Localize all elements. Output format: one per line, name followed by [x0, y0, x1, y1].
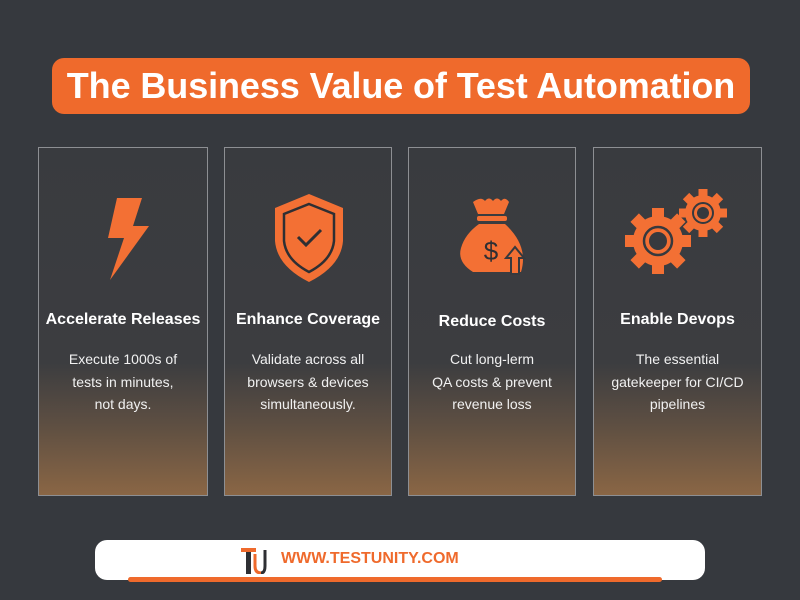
- text: accelerate: Execute 1000s of: [69, 351, 177, 367]
- panel: accelerate releases: [38, 147, 208, 496]
- text: costs: revenue loss: [452, 396, 532, 412]
- text: coverage: browsers & devices: [247, 374, 369, 390]
- text: costs: Cut long-lerm: [450, 351, 534, 367]
- text: costs: [432, 351, 552, 412]
- panel: enhance coverage: [224, 147, 392, 496]
- text: accelerate: not days.: [95, 396, 151, 412]
- icon: shield: [275, 194, 343, 282]
- text: coverage: simultaneously.: [260, 396, 356, 412]
- footer accent line: [128, 577, 662, 582]
- text: devops: gatekeeper for CI/CD: [611, 374, 744, 390]
- heading: enhance coverage: Enhance Coverage: [236, 311, 380, 328]
- text: coverage: [247, 351, 369, 412]
- text: devops: The essential: [636, 351, 719, 367]
- text: accelerate: [69, 351, 178, 412]
- text: costs: QA costs & prevent: [432, 374, 552, 390]
- icon: lightning bolt: [108, 198, 149, 280]
- icon: money bag: $: [484, 236, 499, 266]
- heading: reduce costs: Reduce Costs: [439, 313, 545, 330]
- text: devops: pipelines: [650, 396, 705, 412]
- icon: gears: [625, 189, 727, 274]
- footer: [95, 540, 705, 580]
- icon: money bag: [460, 198, 523, 273]
- footer url: WWW.TESTUNITY.COM: [281, 550, 459, 567]
- text: devops: [611, 351, 744, 412]
- logo: [241, 548, 266, 574]
- heading: enable devops: Enable Devops: [620, 311, 735, 328]
- heading: accelerate releases: Accelerate Releases: [46, 311, 200, 328]
- panel: enable devops: [593, 147, 762, 496]
- text: coverage: Validate across all: [252, 351, 364, 367]
- title: The Business Value of Test Automation: [67, 65, 735, 106]
- panel: reduce costs: [408, 147, 576, 496]
- text: accelerate: tests in minutes,: [72, 374, 174, 390]
